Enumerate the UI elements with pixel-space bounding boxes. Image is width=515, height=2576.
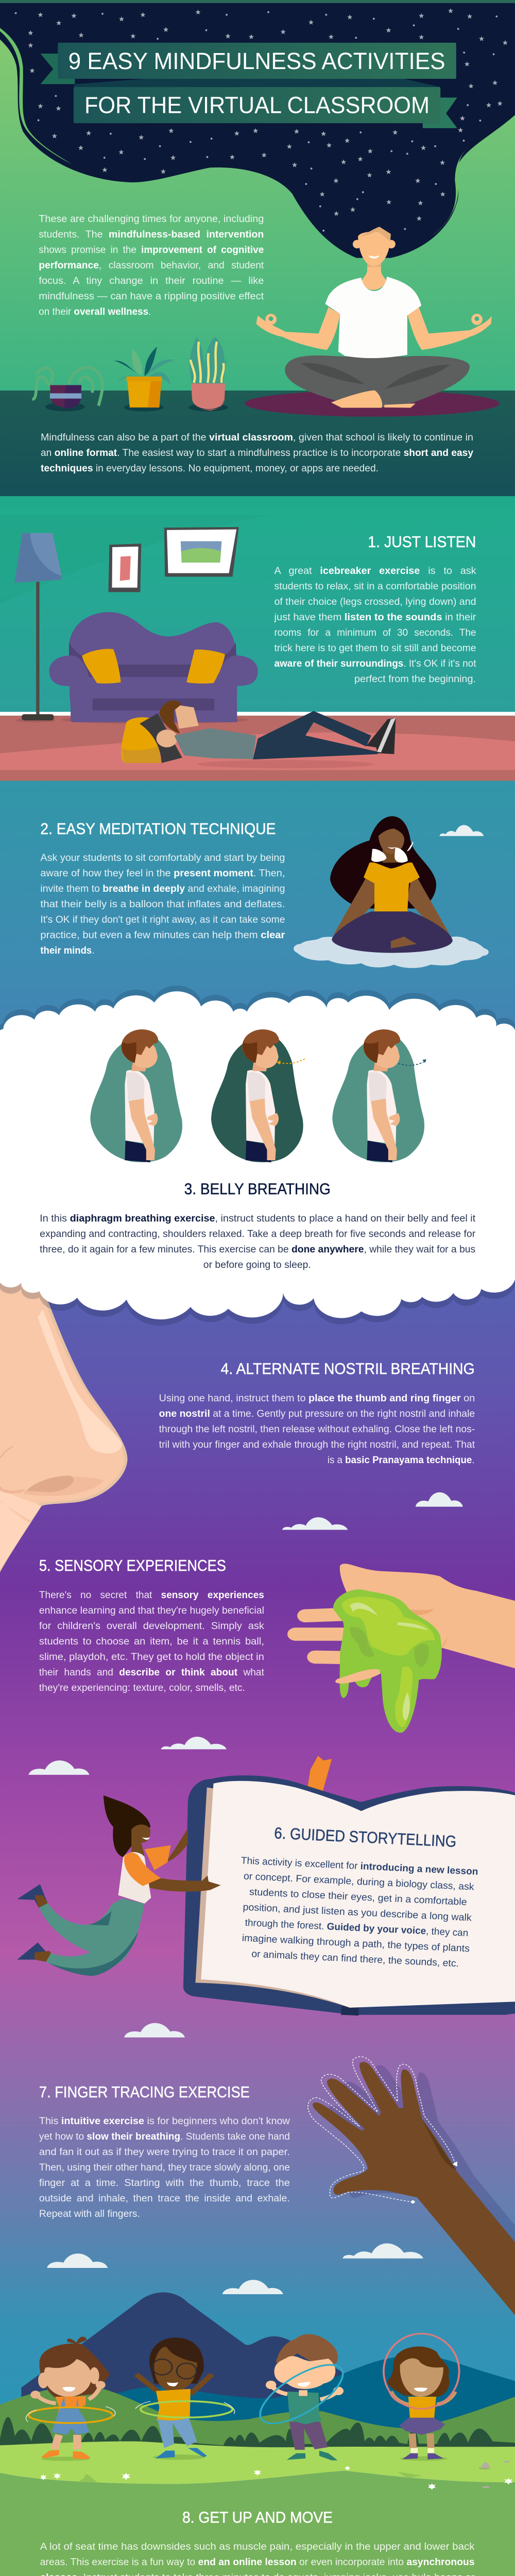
section 6 text on book: position, and just listen as you describe a long walk: [243, 1902, 472, 1923]
section 3 cloud panel: [0, 986, 515, 1326]
yoga mat: [245, 391, 500, 417]
flying girl: [17, 1795, 221, 1976]
section 1 text: just have them listen to the sounds in their: [273, 612, 476, 623]
floor band: [0, 391, 515, 496]
meditating person: [256, 227, 492, 408]
section 4 text: Using one hand, instruct them to place the thumb and ring finger on: [159, 1393, 475, 1404]
section 2 text: [40, 853, 285, 956]
section 2 text: aware of how they feel in the present moment . Then,: [40, 868, 285, 879]
floor: [0, 712, 515, 781]
section 2 text: invite them to breathe in deeply and exhale, imagining: [40, 884, 285, 894]
outro paragraph: Mindfulness can also be a part of the virtual classroom , given that school is likely to continue in: [41, 432, 473, 443]
section 1 text: students to relax, sit in a comfortable position: [274, 581, 476, 592]
intro paragraph: focus. A tiny change in their routine — like: [39, 276, 264, 286]
outro paragraph: techniques in everyday lessons. No equipment, money, or apps are needed.: [41, 463, 379, 474]
boy breathing: inhale: [211, 1029, 305, 1162]
small cloud: [439, 825, 484, 836]
title banner: [40, 43, 457, 128]
section 4 text: [159, 1393, 475, 1466]
purple sofa: [49, 612, 258, 722]
illustration: plants and meditating person: [32, 227, 500, 417]
section 3 text: In this diaphragm breathing exercise , instruct students to place a hand on their belly and feel it: [40, 1213, 476, 1224]
section 1 text: trick here is to get them to sit still and become: [274, 643, 476, 654]
section 1 heading: 1. JUST LISTEN: [368, 533, 476, 551]
outro paragraph: an online format. The easiest way to start a mindfulness practice is to incorporate short and easy: [41, 448, 473, 459]
section 5 text: enhance learning and that they're hugely beneficial: [39, 1605, 264, 1616]
section 4 text: one nostril at a time. Gently put pressure on the right nostril and inhale: [159, 1409, 475, 1419]
open book and flying girl: [17, 1756, 515, 2015]
section 3 heading: 3. BELLY BREATHING: [184, 1180, 331, 1198]
section 1 text: rooms for a minimum of 30 seconds. The: [274, 628, 476, 638]
green hair streaks: [0, 28, 470, 236]
stars: [15, 8, 508, 232]
section 2 text: Ask your students to sit comfortably and start by being: [40, 853, 285, 863]
intro paragraph: students. The mindfulness-based intervention: [39, 229, 264, 240]
section 3 text: expanding and contracting, shoulders relaxed. Take a deep breath for five seconds and release for: [40, 1229, 476, 1240]
section 1 text: perfect from the beginning.: [354, 674, 476, 685]
tracing dashed outline: [308, 2057, 455, 2202]
section 7 heading: 7. FINGER TRACING EXERCISE: [39, 2083, 250, 2101]
mountains: [0, 2293, 515, 2447]
title line 2: FOR THE VIRTUAL CLASSROOM: [84, 92, 430, 118]
section 3 text: or before going to sleep.: [203, 1260, 311, 1270]
night hair: [0, 3, 515, 258]
section 7 text: finger at a time. Starting with the thumb, trace the: [39, 2178, 290, 2189]
tree line: [0, 2417, 515, 2449]
arrow: inhale: [279, 1059, 305, 1063]
intro paragraph: [39, 214, 264, 317]
book pages: [195, 1787, 362, 2008]
hand shadow: [329, 2065, 515, 2318]
section 8 heading: 8. GET UP AND MOVE: [182, 2508, 333, 2527]
title line 1: 9 EASY MINDFULNESS ACTIVITIES: [68, 48, 445, 74]
header: night sky hair and stars: [0, 0, 515, 258]
section 2 text: It's OK if they don't get it right away, as it can take some: [40, 914, 285, 925]
section 2 text: practice, but even a few minutes can help them clear: [40, 930, 285, 941]
section 6 text on book: This activity is excellent for introducing a new lesson: [241, 1855, 478, 1877]
section 7 text: Repeat with all fingers.: [39, 2209, 140, 2219]
section 2 text: their minds.: [40, 945, 94, 956]
intro paragraph: These are challenging times for anyone, including: [39, 214, 264, 225]
cloud seat: [294, 937, 489, 968]
section 7 text: This intuitive exercise is for beginners who don't know: [39, 2116, 290, 2127]
boy breathing: exhale: [332, 1029, 426, 1162]
illustration: woman meditating on cloud: [294, 816, 489, 968]
grass: [0, 2442, 515, 2484]
intro paragraph: shows promise in the improvement of cognitive: [39, 245, 264, 256]
kid 2 green hoop: [135, 2337, 235, 2460]
section 6 text on book: or concept. For example, during a biology class, ask: [243, 1871, 474, 1893]
section 3 text: three, do it again for a few minutes. This exercise can be done anywhere, while they wait for a bus: [40, 1244, 475, 1255]
woman: [330, 816, 453, 953]
section 4 text: through the left nostril, then release without exhaling. Close the left nos-: [159, 1424, 475, 1435]
section 4 text: tril with your finger and exhale through the right nostril, and repeat. That: [159, 1439, 475, 1450]
kid 1 orange hoop: [26, 2337, 115, 2461]
section 1 text: of their choice (legs crossed, lying down) and: [274, 597, 476, 607]
hand with slime: [296, 1564, 515, 1733]
nose illustration: [0, 1265, 127, 1572]
section 7 text: outside and inhale, then trace the inside and exhale.: [39, 2193, 290, 2204]
section 5 text: There's no secret that sensory experiences: [39, 1590, 264, 1601]
kid 4 pink hoop: [384, 2334, 459, 2461]
section 6 heading: 6. GUIDED STORYTELLING: [274, 1824, 457, 1851]
icon: trailing plant in purple pot: [32, 367, 102, 411]
intro paragraph: on their overall wellness.: [39, 307, 151, 317]
intro paragraph: performance, classroom behavior, and student: [39, 260, 264, 271]
section 7 text: yet how to slow their breathing. Students take one hand: [39, 2131, 290, 2142]
small clouds: [28, 1493, 463, 1775]
section 5 text: [39, 1590, 265, 1693]
section 5 text: slime, playdoh, etc. They get to hold the object in: [39, 1652, 264, 1663]
section 6 text on book: or animals they can find there, the sounds, etc.: [251, 1948, 459, 1969]
section 6 text on book: [236, 1822, 480, 1970]
section 5 text: their hands and describe or think about what: [39, 1667, 265, 1678]
section 8 text: A lot of seat time has downsides such as muscle pain, especially in the upper and lower back: [40, 2541, 475, 2552]
section 6 text on book: students to close their eyes, get in a comfortable: [249, 1887, 467, 1908]
wall frame large: [164, 527, 239, 577]
brown hand: [313, 2062, 515, 2315]
kid 3 teal hoop: [249, 2334, 354, 2461]
section 5 heading: 5. SENSORY EXPERIENCES: [39, 1556, 226, 1574]
clouds and slime hand: [28, 1493, 515, 1775]
section 2 text: that their belly is a balloon that inflates and deflates.: [40, 899, 285, 910]
clouds: [47, 2243, 423, 2294]
book cover: [183, 1775, 515, 2015]
section 6 text on book: imagine walking through a path, the types of plants: [242, 1933, 470, 1954]
bookmark: [307, 1756, 332, 1794]
section 6 text on book: through the forest. Guided by your voice, they can: [245, 1918, 469, 1939]
tracing start dot and arrow: [411, 2200, 415, 2204]
section 5 text: they're experiencing: texture, color, smells, etc.: [39, 1683, 245, 1693]
section 8 text: areas. This exercise is a fun way to end an online lesson or even incorporate into asynchronous: [40, 2557, 475, 2568]
small cloud: [124, 2023, 185, 2038]
section 1 text: [273, 566, 476, 685]
section 2 heading: 2. EASY MEDITATION TECHNIQUE: [40, 820, 276, 838]
section 3 text: [40, 1213, 476, 1270]
person lying on floor: [121, 701, 396, 763]
section 1 text: A great icebreaker exercise is to ask: [274, 566, 476, 577]
section 7 text: [39, 2116, 290, 2219]
outro paragraph: [41, 432, 473, 474]
wall frame small: [108, 544, 141, 592]
section 7 text: and fan it out as if they were trying to trace it on paper.: [39, 2147, 290, 2158]
section 5 text: students to choose an item, be it a tennis ball,: [39, 1636, 264, 1647]
section 1 text: aware of their surroundings. It's OK if it's not: [274, 658, 476, 669]
section 7 text: Then, using their other hand, they trace slowly along, one: [39, 2162, 290, 2173]
section 4 heading: 4. ALTERNATE NOSTRIL BREATHING: [221, 1360, 475, 1378]
section 5 text: for children's overall development. Simply ask: [39, 1621, 264, 1632]
arrow: exhale: [399, 1062, 424, 1065]
floor lamp: [14, 533, 62, 720]
boy breathing: normal: [90, 1029, 182, 1162]
intro paragraph: mindfulness — can have a rippling positive effect: [39, 291, 264, 302]
tracing hand and cloud: [124, 2023, 515, 2318]
illustration: living room scene: [0, 515, 515, 781]
landscape with hula hoop kids: [0, 2243, 515, 2576]
icon: leafy plant in yellow pot: [114, 347, 175, 411]
icon: snake plant in pink pot: [188, 337, 228, 411]
section 8 text: [40, 2541, 475, 2576]
section 4 text: is a basic Pranayama technique.: [328, 1455, 474, 1466]
flowers and rocks: [40, 2466, 513, 2490]
